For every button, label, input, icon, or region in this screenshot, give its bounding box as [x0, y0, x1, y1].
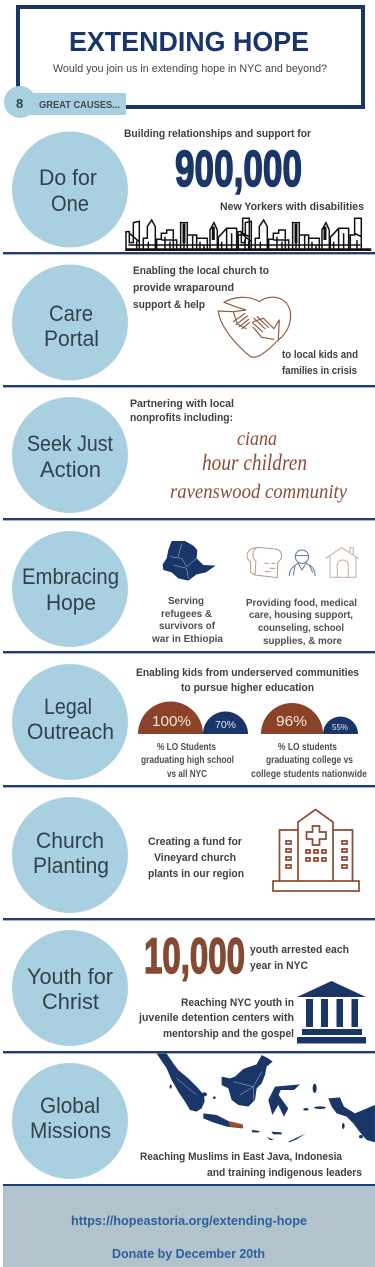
icon: courthouse: [297, 981, 366, 1044]
text: enabling kids: [136, 667, 359, 694]
text: providing food: Providing food, medical: [246, 597, 357, 609]
text: youth arrested: [250, 944, 349, 972]
text: serving refugees: war in Ethiopia: [151, 633, 223, 645]
icon: bread: [247, 547, 282, 578]
circle label: Legal Outreach: Legal: [44, 694, 92, 719]
text: New Yorkers with disabilities: New Yorkers with disabilities: [220, 201, 364, 213]
map of Indonesia: [157, 1054, 375, 1142]
caption: high school: graduating high school: [141, 754, 234, 766]
text: reaching NYC youth: mentorship and the gospel: [163, 1028, 294, 1040]
circle label: Seek Just Action: Seek Just: [27, 431, 113, 456]
text: reaching NYC youth: [138, 997, 294, 1040]
caption: college: [251, 741, 367, 780]
text: enabling the local church: [133, 265, 269, 311]
caption: college: % LO students: [278, 741, 337, 753]
icon: church building: [273, 810, 359, 891]
text: creating a fund: plants in our region: [148, 868, 244, 880]
chart: college graduation: [261, 703, 358, 734]
text: partnering: Partnering with local: [130, 398, 234, 410]
text: to local kids: families in crisis: [282, 365, 357, 377]
text: creating a fund: Vineyard church: [154, 852, 236, 864]
text: nonprofit names: ciana: [237, 428, 277, 450]
text: reaching Muslims: Reaching Muslims in East Java, Indonesia: [140, 1151, 343, 1163]
chart: college graduation: 55%: [332, 723, 348, 732]
text: nonprofit names: [170, 428, 347, 503]
subtitle: Would you join us in extending hope in NYC and beyond?: [53, 63, 327, 75]
chart: high school graduation: 70%: [215, 719, 236, 731]
circle label: Global Missions: Global: [40, 1093, 100, 1118]
caption: college: graduating college vs: [266, 754, 353, 766]
circle label: Church Planting: [12, 797, 128, 913]
text: serving refugees: Serving: [168, 595, 204, 607]
circle label: Youth for Christ: [12, 930, 128, 1046]
text: enabling the local church: Enabling the local church to: [133, 265, 269, 277]
icon: house: [326, 548, 358, 577]
donate deadline: Donate by December 20th: [112, 1246, 265, 1261]
circle label: Care Portal: [12, 264, 128, 380]
circle label: Church Planting: Church: [36, 828, 104, 853]
panel: Care Portal: [12, 264, 358, 380]
number: 900,000: 900,000: [175, 140, 302, 197]
icon: map of Ethiopia: [163, 541, 216, 581]
chart: college graduation: 96%: [276, 713, 307, 730]
text: reaching NYC youth: Reaching NYC youth in: [181, 997, 294, 1009]
circle label: Embracing Hope: [12, 531, 128, 647]
caption: high school: vs all NYC: [167, 768, 207, 780]
chart: high school graduation: 100%: [152, 713, 191, 730]
text: partnering: [130, 398, 234, 424]
panel: Legal Outreach: [12, 664, 367, 780]
caption: high school: % LO Students: [157, 741, 216, 753]
circle label: Seek Just Action: [12, 397, 128, 513]
text: enabling kids: Enabling kids from underserved communities: [136, 667, 359, 679]
text: serving refugees: [151, 595, 223, 645]
title: EXTENDING HOPE: [69, 26, 309, 57]
text: enabling kids: to pursue higher education: [181, 682, 314, 694]
number: 10,000: 10,000: [144, 928, 245, 984]
icon: doctor: [289, 550, 315, 576]
text: nonprofit names: ravenswood community: [170, 481, 347, 503]
circle label: Care Portal: Care: [49, 301, 93, 326]
text: creating a fund: Creating a fund for: [148, 836, 243, 848]
caption: high school: [141, 741, 234, 780]
link text: https://hopeastoria.org/extending-hope: [71, 1213, 307, 1228]
text: enabling the local church: support & help: [133, 299, 205, 311]
chart: high school graduation: [138, 702, 248, 734]
text: to local kids: [282, 349, 358, 377]
badge: 8 great causes: [4, 86, 126, 118]
icon: city skyline: [125, 218, 371, 251]
circle label: Global Missions: [12, 1063, 128, 1179]
circle label: Do for One: [12, 132, 128, 248]
text: reaching Muslims: and training indigenous leaders: [207, 1167, 362, 1179]
circle label: Embracing Hope: Embracing: [22, 564, 119, 589]
panel: Church Planting: [12, 797, 359, 913]
text: building relationships: Building relationships and support for: [124, 128, 312, 140]
footer panel: [3, 1186, 375, 1267]
text: nonprofit names: hour children: [202, 450, 307, 475]
text: providing food: supplies, & more: [263, 635, 342, 647]
panel: Embracing Hope: [12, 531, 358, 647]
text: creating a fund: [148, 836, 244, 880]
text: youth arrested: youth arrested each: [250, 944, 349, 956]
panel: Global Missions: [12, 1054, 375, 1179]
text: partnering: nonprofits including:: [130, 412, 233, 424]
text: reaching Muslims: [140, 1151, 362, 1179]
text: providing food: [246, 597, 357, 647]
text: providing food: care, housing support,: [249, 609, 353, 621]
circle label: Seek Just Action: Action: [40, 457, 101, 482]
circle label: Church Planting: Planting: [33, 853, 109, 878]
circle label: Legal Outreach: [12, 664, 128, 780]
text: serving refugees: refugees &: [161, 608, 212, 620]
panel: Do for One: [12, 128, 371, 251]
circle label: Do for One: One: [51, 191, 89, 216]
circle label: Do for One: Do for: [39, 165, 97, 190]
text: to local kids: to local kids and: [282, 349, 358, 361]
text: reaching NYC youth: juvenile detention centers with: [138, 1012, 294, 1024]
text: providing food: counseling, school: [258, 622, 344, 634]
circle label: Care Portal: Portal: [44, 326, 99, 351]
panel: Youth for Christ: [12, 928, 366, 1046]
circle label: Global Missions: Missions: [30, 1118, 111, 1143]
circle label: Legal Outreach: Outreach: [27, 719, 114, 744]
text: youth arrested: year in NYC: [250, 960, 308, 972]
text: enabling the local church: provide wraparound: [133, 282, 234, 294]
header panel: [18, 7, 363, 107]
circle label: Youth for Christ: Youth for: [27, 964, 113, 989]
badge: 8 great causes: 8: [16, 96, 23, 111]
panel: Seek Just Action: [12, 397, 347, 513]
badge: 8 great causes: GREAT CAUSES...: [39, 100, 120, 111]
icon: heart with hands: [218, 297, 291, 357]
text: serving refugees: survivors of: [159, 620, 215, 632]
circle label: Embracing Hope: Hope: [46, 590, 96, 615]
circle label: Youth for Christ: Christ: [42, 989, 99, 1014]
